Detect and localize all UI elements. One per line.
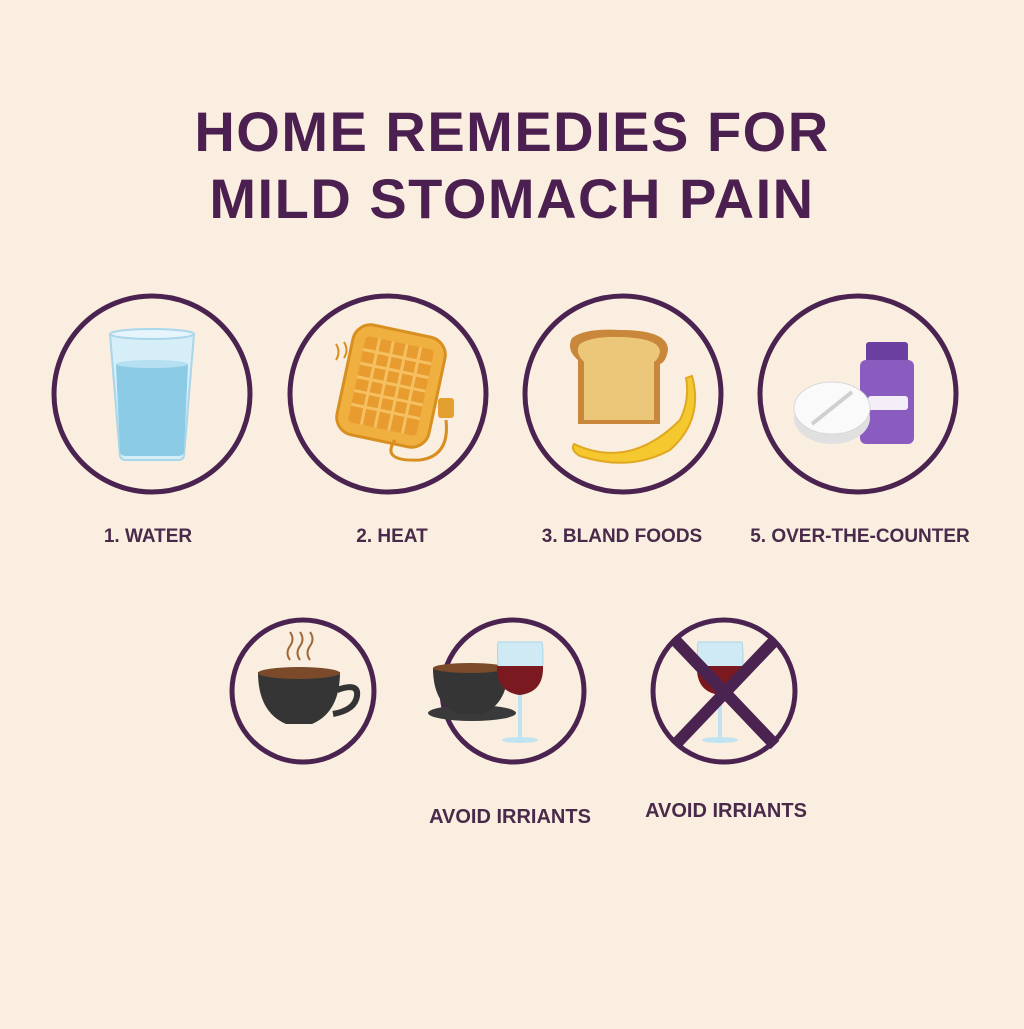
panel: over-the-counter (750, 296, 970, 547)
icon: heating pad (333, 321, 454, 460)
icon: toast and banana (570, 330, 695, 463)
label: avoid irritants 2: AVOID IRRIANTS (645, 800, 807, 822)
title: HOME REMEDIES FOR (194, 100, 830, 163)
label: water: 1. WATER (104, 526, 192, 547)
panel: coffee (232, 620, 374, 762)
panel: no wine (645, 620, 807, 822)
icon: pill bottle and tablet (794, 342, 914, 444)
label: heat: 2. HEAT (356, 526, 428, 547)
panel: coffee and wine (428, 620, 591, 828)
label: bland foods: 3. BLAND FOODS (542, 526, 702, 547)
icon: coffee and wine (428, 642, 543, 743)
label: over-the-counter: 5. OVER-THE-COUNTER (750, 526, 970, 547)
icon: glass of water (110, 329, 194, 460)
title: MILD STOMACH PAIN (209, 167, 815, 230)
icon: coffee cup (258, 632, 357, 724)
panel: heat (290, 296, 486, 547)
panel: water (54, 296, 250, 547)
label: avoid irritants 1: AVOID IRRIANTS (429, 806, 591, 828)
title (194, 100, 830, 230)
icon: wine glass crossed (675, 640, 775, 745)
panel: bland foods (525, 296, 721, 547)
